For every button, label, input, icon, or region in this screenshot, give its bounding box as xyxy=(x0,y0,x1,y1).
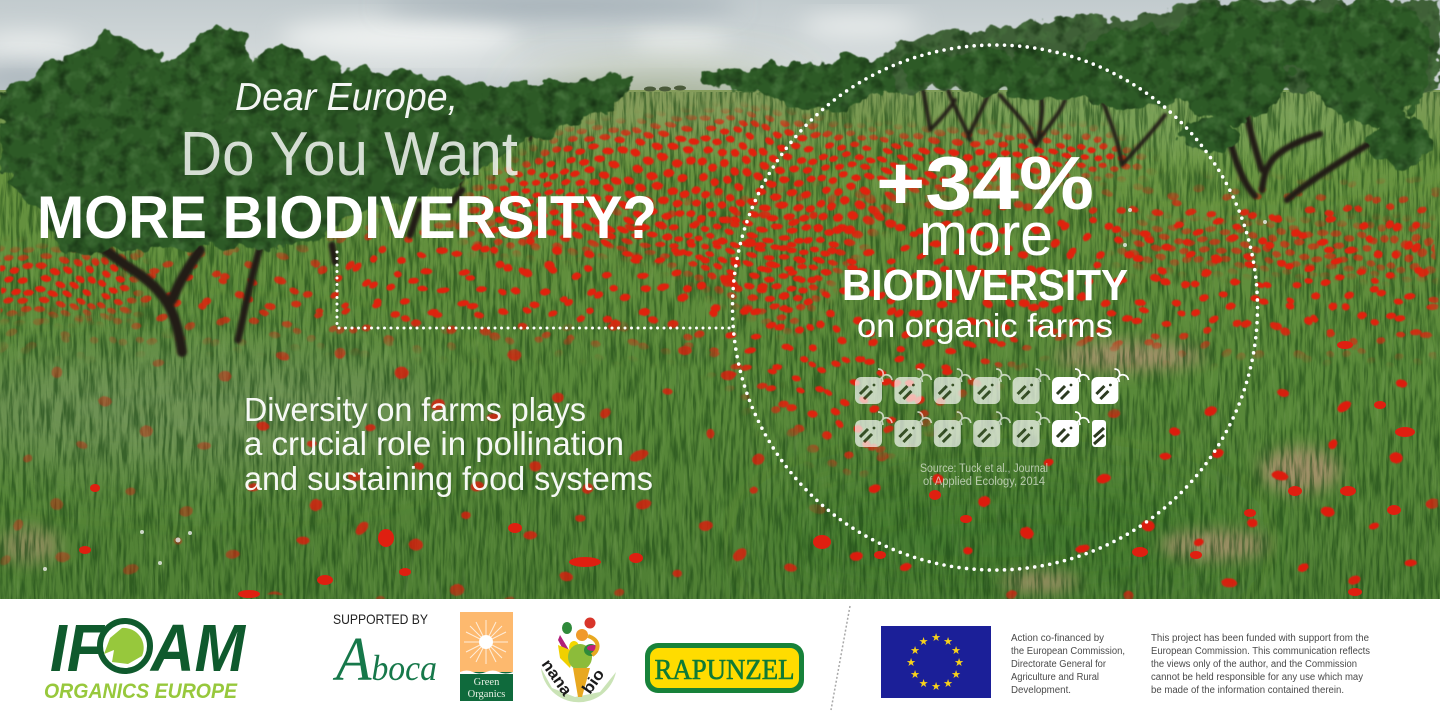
heading line: Dear Europe: Dear Europe, xyxy=(235,76,458,119)
source note: Source: Tuck et al., Journal xyxy=(920,463,1048,475)
logo: Rapunzel: RAPUNZEL xyxy=(654,654,794,686)
connector: dotted line from heading to circle xyxy=(337,252,733,328)
right row canopies xyxy=(899,0,1434,166)
orchard tree canopies xyxy=(0,0,1434,250)
statistic callout xyxy=(842,141,1128,344)
right row far xyxy=(702,56,900,110)
EU stars: ★ xyxy=(931,632,941,644)
tree trunks xyxy=(92,85,1400,352)
white wildflowers xyxy=(43,208,1267,571)
body text: Diversity on farms plays xyxy=(244,391,586,428)
logo: Rapunzel xyxy=(645,643,804,693)
stat: +34%: +34% xyxy=(876,141,1094,225)
logo: Green Organics: Organics xyxy=(468,689,505,700)
EU stars: ★ xyxy=(951,669,961,681)
logo: Aboca: Aboca xyxy=(332,626,437,694)
logo: IFOAM Organics Europe: IFOAM xyxy=(50,611,246,686)
grass texture xyxy=(0,92,1440,600)
disclaimer: the views only of the author, and the Commission xyxy=(1151,659,1357,670)
left big tree xyxy=(0,25,637,250)
EU stars: ★ xyxy=(906,657,916,669)
EU stars: ★ xyxy=(919,636,929,648)
EU stars: ★ xyxy=(919,678,929,690)
EU co-financing note xyxy=(1011,633,1125,696)
far trees backdrop xyxy=(870,0,1440,90)
pictogram: bees row 1 xyxy=(855,369,1128,404)
heading xyxy=(37,76,657,251)
EU co-financing note: Directorate General for xyxy=(1011,659,1107,670)
icon: Europe globe xyxy=(100,621,150,671)
heading line: Do You Want: Do You Want xyxy=(180,120,518,189)
body text: a crucial role in pollination xyxy=(244,425,624,462)
body text xyxy=(244,391,653,497)
disclaimer: European Commission. This communication reflects xyxy=(1151,646,1370,657)
supported by label: SUPPORTED BY xyxy=(333,611,429,627)
poppies: foreground xyxy=(0,300,1440,600)
logo: nana bio: nana xyxy=(538,657,575,699)
EU stars: ★ xyxy=(931,681,941,693)
horizon bushes xyxy=(644,86,686,92)
logo: IFOAM Organics Europe: ORGANICS EUROPE xyxy=(44,680,238,703)
disclaimer xyxy=(1151,633,1370,696)
source note: of Applied Ecology, 2014 xyxy=(923,476,1046,488)
EU co-financing note: Action co-financed by xyxy=(1011,633,1104,644)
EU stars: ★ xyxy=(910,669,920,681)
body text: and sustaining food systems xyxy=(244,460,653,497)
sky xyxy=(0,0,1440,110)
logo: Green Organics xyxy=(460,612,513,701)
dotted circle xyxy=(732,45,1258,570)
disclaimer: cannot be held responsible for any use which may xyxy=(1151,672,1363,683)
EU co-financing note: the European Commission, xyxy=(1011,646,1125,657)
poppies: mid density xyxy=(6,177,1440,478)
disclaimer: be made of the information contained therein. xyxy=(1151,685,1344,696)
EU stars: ★ xyxy=(951,645,961,657)
pictogram: bees row 2 xyxy=(855,412,1106,447)
logo: nana bio xyxy=(538,618,616,702)
poppies: dense drifts xyxy=(0,104,1438,337)
logo: Green Organics: Green xyxy=(474,677,500,688)
heading line: More Biodiversity: MORE BIODIVERSITY? xyxy=(37,184,657,251)
EU co-financing note: Agriculture and Rural xyxy=(1011,672,1099,683)
soil patches xyxy=(0,342,1340,591)
source note xyxy=(920,463,1048,488)
EU stars: ★ xyxy=(910,645,920,657)
EU co-financing note: Development. xyxy=(1011,685,1071,696)
EU flag xyxy=(881,626,991,698)
footer divider xyxy=(831,606,850,710)
stat label: biodiversity: BIODIVERSITY xyxy=(842,261,1128,310)
EU stars: ★ xyxy=(954,657,964,669)
logo: nana bio: bio xyxy=(579,666,608,697)
stat label: more: more xyxy=(919,201,1053,268)
footer band xyxy=(0,599,1440,720)
field base xyxy=(0,90,1440,602)
EU stars xyxy=(906,632,964,693)
EU stars: ★ xyxy=(943,636,953,648)
EU stars: ★ xyxy=(943,678,953,690)
stat label: on organic farms: on organic farms xyxy=(857,307,1113,344)
disclaimer: This project has been funded with support from the xyxy=(1151,633,1369,644)
